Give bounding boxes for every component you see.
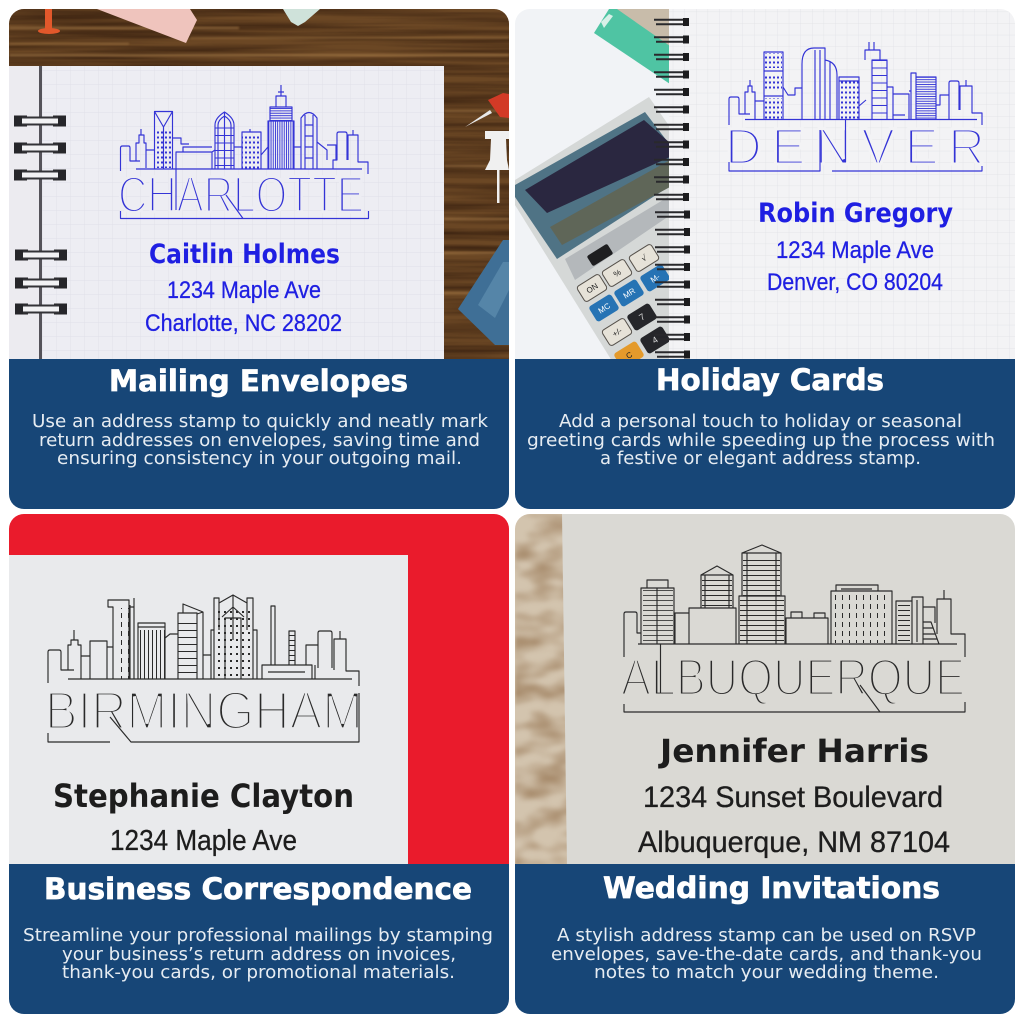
caption: holiday cards: Holiday Cards [656, 363, 884, 397]
caption: wedding invitations [515, 864, 1015, 1014]
icon: calculator: MC [597, 301, 612, 316]
photo: wood desk background [9, 9, 509, 361]
stamp: Denver name and address [758, 198, 953, 296]
caption: wedding invitations: A stylish address stamp can be used on RSVP [557, 925, 976, 946]
stamp: Charlotte city wordmark: CHARLOTTE [118, 166, 364, 223]
icon: calculator: 7 [637, 311, 647, 323]
stamp: Albuquerque name and address: Jennifer Harris [658, 732, 929, 770]
caption: wedding invitations: Wedding Invitations [603, 871, 940, 905]
icon: calculator: √ [640, 253, 650, 264]
icon: orange push pin [38, 9, 60, 34]
photo: white desk background [515, 9, 670, 361]
caption: holiday cards: greeting cards while speeding up the process with [527, 430, 995, 451]
icon: calculator [515, 97, 672, 370]
stamp: Charlotte name and address: Caitlin Holmes [149, 239, 340, 270]
stamp: Charlotte name and address [145, 239, 342, 337]
caption: business correspondence: thank-you cards, or promotional materials. [62, 962, 455, 983]
photo: red cover background [9, 514, 509, 866]
stamp: Albuquerque city wordmark: ALBUQUERQUE [621, 649, 965, 707]
icon: blue ruler [458, 240, 509, 345]
stamp: Denver city wordmark: DENVER [725, 118, 985, 175]
icon: pink tape [97, 9, 197, 43]
stamp: Denver name and address: Robin Gregory [758, 198, 953, 229]
stamp: Albuquerque name and address: 1234 Sunset Boulevard [643, 781, 943, 814]
icon: calculator: ON [585, 281, 600, 295]
caption: holiday cards [515, 359, 1015, 509]
caption: mailing envelopes: return addresses on envelopes, saving time and [39, 430, 480, 451]
stamp: Albuquerque name and address [638, 732, 950, 859]
icon: calculator: C [624, 350, 634, 361]
icon: calculator: % [612, 268, 623, 279]
stamp: Denver name and address: 1234 Maple Ave [776, 237, 934, 264]
photo: textured paper card [562, 514, 1015, 866]
stamp: Birmingham name and address: Stephanie Clayton [53, 777, 354, 815]
stamp: Birmingham skyline [48, 595, 359, 742]
panel: holiday cards [515, 9, 1015, 509]
stamp: Albuquerque skyline [624, 545, 965, 712]
stamp: Charlotte name and address: 1234 Maple Ave [167, 277, 321, 304]
icon: mint object [283, 9, 320, 26]
panel: mailing envelopes [9, 9, 509, 509]
icon: calculator: +/- [611, 326, 624, 339]
stamp: Albuquerque name and address: Albuquerque, NM 87104 [638, 826, 950, 859]
stamp: Birmingham name and address: 1234 Maple Ave [110, 825, 297, 857]
caption: wedding invitations: envelopes, save-the-date cards, and thank-you [551, 944, 982, 965]
icon: calculator: 4 [650, 334, 660, 346]
stamp: Charlotte name and address: Charlotte, NC 28202 [145, 310, 342, 337]
panel: business correspondence [9, 514, 509, 1014]
stamp: Charlotte skyline [120, 85, 368, 218]
caption: holiday cards: Add a personal touch to holiday or seasonal [559, 411, 962, 432]
caption: business correspondence: Business Correspondence [44, 872, 472, 906]
caption: business correspondence: Streamline your professional mailings by stamping [23, 925, 493, 946]
notebook: paper and spiral [9, 66, 444, 361]
caption: mailing envelopes: Use an address stamp to quickly and neatly mark [32, 411, 489, 432]
caption: mailing envelopes [9, 359, 509, 509]
icon: mint eraser [594, 9, 670, 84]
icon: calculator: M- [649, 272, 662, 285]
icon: white push pin [485, 131, 509, 203]
photo: beige textured background [515, 514, 570, 866]
icon: calculator: MR [622, 286, 637, 301]
stamp: Denver name and address: Denver, CO 80204 [767, 269, 943, 296]
caption: mailing envelopes: ensuring consistency in your outgoing mail. [57, 448, 462, 469]
stamp: Birmingham city wordmark: BIRMINGHAM [45, 681, 363, 741]
stamp: Denver skyline [729, 42, 982, 171]
caption: business correspondence [9, 864, 509, 1014]
caption: wedding invitations: notes to match your wedding theme. [594, 962, 939, 983]
caption: holiday cards: a festive or elegant address stamp. [600, 448, 921, 469]
photo: white card [9, 555, 408, 866]
icon: red push pin [465, 93, 509, 127]
caption: business correspondence: your business’s return address on invoices, [62, 944, 456, 965]
panel: wedding invitations [515, 514, 1015, 1014]
caption: mailing envelopes: Mailing Envelopes [109, 364, 408, 398]
notebook: grid paper and spiral [654, 9, 1015, 361]
stamp: Birmingham name and address [53, 777, 354, 857]
